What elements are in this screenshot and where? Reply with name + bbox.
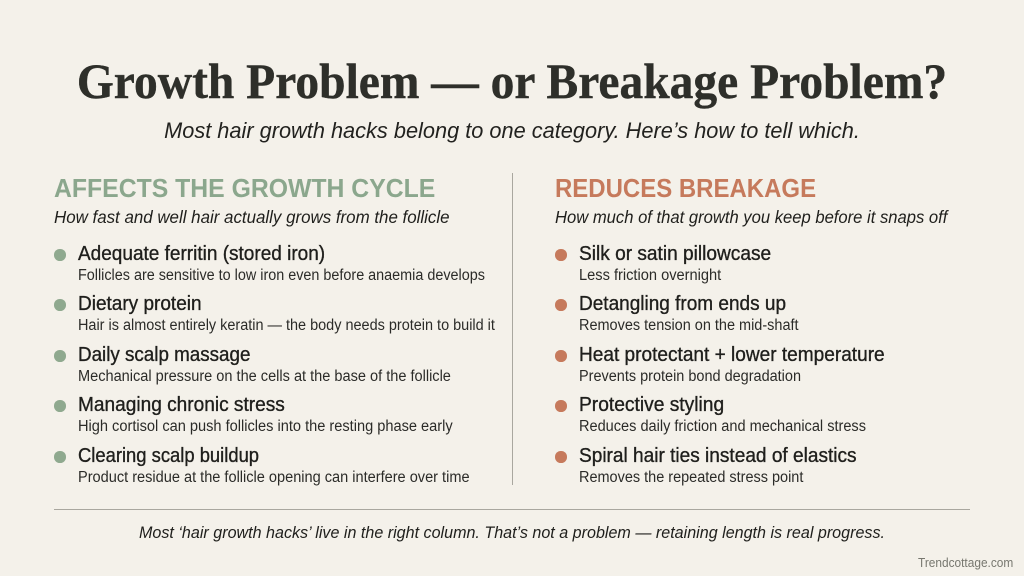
item: protein: Hair is almost entirely keratin — the body needs protein to build it: [78, 317, 495, 334]
item: pillowcase: Silk or satin pillowcase: [579, 243, 771, 265]
item: pillowcase: [555, 243, 771, 284]
item: buildup: Clearing scalp buildup: [78, 445, 259, 467]
item: pillowcase: Less friction overnight: [579, 267, 721, 284]
item: hair ties: Spiral hair ties instead of elastics: [579, 445, 857, 467]
item: detangling: [555, 293, 799, 334]
item: stress: [54, 394, 453, 435]
item: ferritin: [54, 243, 485, 284]
heading: growth cycle: AFFECTS THE GROWTH CYCLE: [54, 173, 435, 203]
title: Growth Problem — or Breakage Problem?: [77, 53, 947, 109]
item: protective styling: [555, 394, 866, 435]
item: massage: Daily scalp massage: [78, 344, 250, 366]
panel: growth cycle: [54, 173, 495, 486]
item: heat protectant: Heat protectant + lower temperature: [579, 344, 885, 366]
item: stress: Managing chronic stress: [78, 394, 285, 416]
item: heat protectant: [555, 344, 885, 385]
item: massage: Mechanical pressure on the cells at the base of the follicle: [78, 368, 451, 385]
subtitle: Most hair growth hacks belong to one category. Here’s how to tell which.: [164, 118, 860, 143]
item: heat protectant: Prevents protein bond degradation: [579, 368, 801, 385]
item: protein: [54, 293, 495, 334]
panel: reduces breakage: [555, 173, 949, 486]
footer note: Most ‘hair growth hacks’ live in the right column. That’s not a problem — retaining length is real progress.: [139, 523, 885, 542]
item: massage: [54, 344, 451, 385]
item: hair ties: [555, 445, 857, 486]
item: buildup: Product residue at the follicle opening can interfere over time: [78, 469, 470, 486]
item: protective styling: Protective styling: [579, 394, 724, 416]
subheading: reduces breakage: How much of that growth you keep before it snaps off: [555, 206, 947, 226]
item: ferritin: Follicles are sensitive to low iron even before anaemia develops: [78, 267, 485, 284]
item: hair ties: Removes the repeated stress point: [579, 469, 803, 486]
item: buildup: [54, 445, 470, 486]
item: ferritin: Adequate ferritin (stored iron): [78, 243, 325, 265]
item: stress: High cortisol can push follicles into the resting phase early: [78, 418, 453, 435]
item: protein: Dietary protein: [78, 293, 202, 315]
watermark: Trendcottage.com: [918, 556, 1013, 570]
heading: reduces breakage: REDUCES BREAKAGE: [555, 173, 816, 203]
item: detangling: Detangling from ends up: [579, 293, 786, 315]
item: detangling: Removes tension on the mid-shaft: [579, 317, 799, 334]
item: protective styling: Reduces daily friction and mechanical stress: [579, 418, 866, 435]
subheading: growth cycle: How fast and well hair actually grows from the follicle: [54, 206, 450, 226]
